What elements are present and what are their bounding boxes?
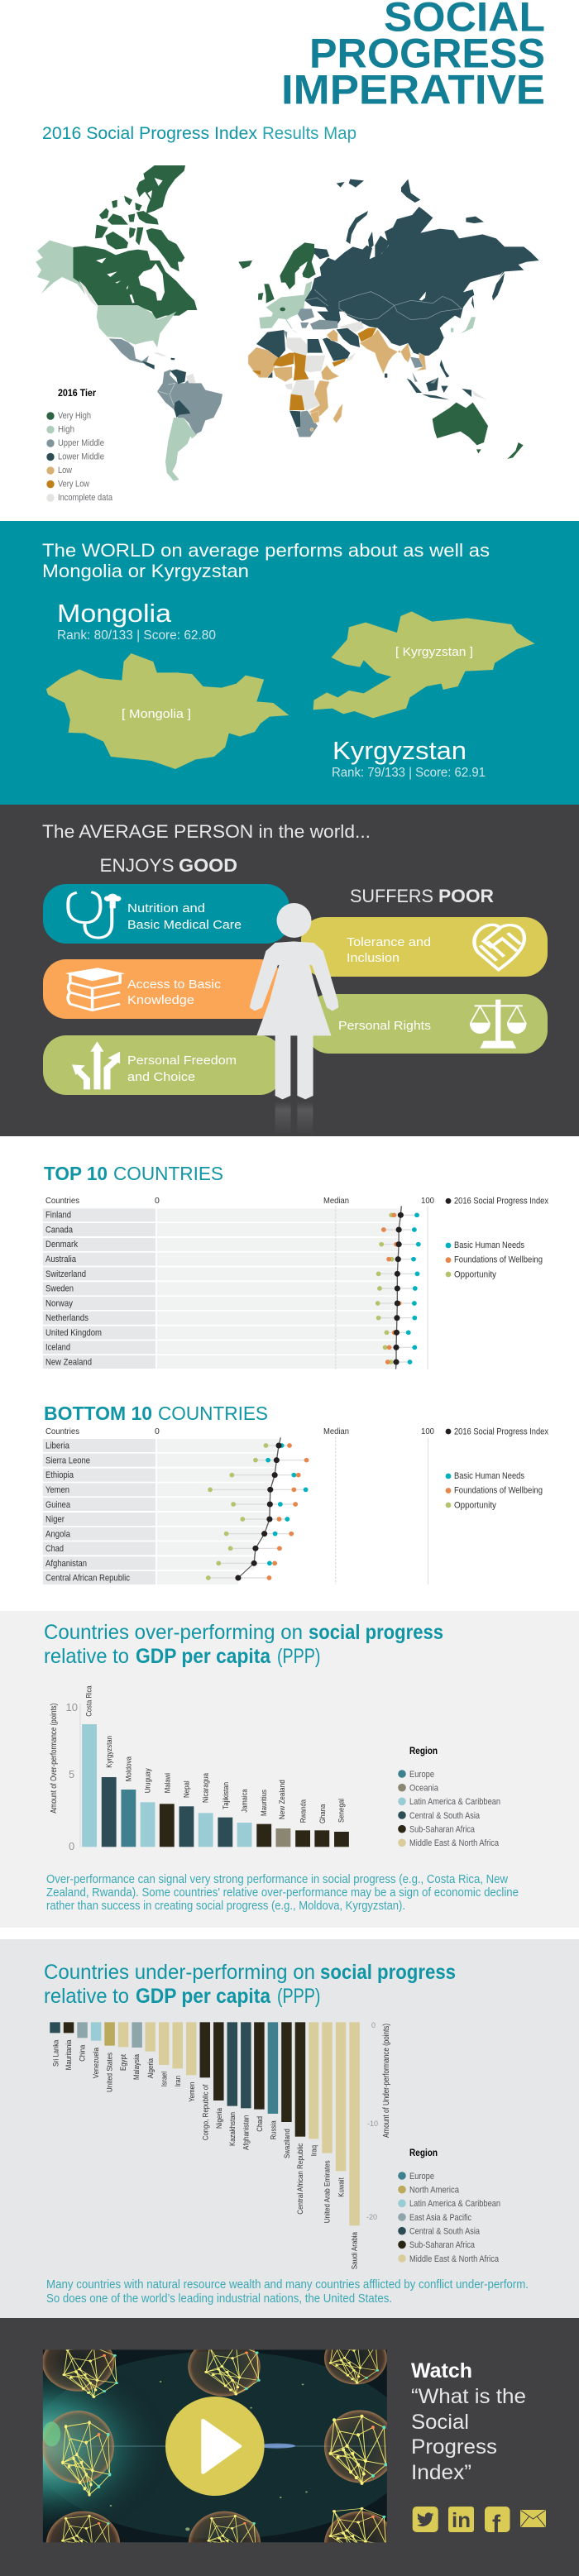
pill: freedom: and Choice [127, 1070, 195, 1084]
under-performance bars [50, 2022, 360, 2225]
top 10 country labels [45, 1211, 102, 1367]
map heading: Results Map [262, 124, 356, 143]
over-performance country labels: New Zealand [278, 1780, 287, 1819]
under-performance caption: So does one of the world’s leading industrial nations, the United States. [46, 2292, 392, 2306]
icon: books [68, 969, 120, 1011]
Kyrgyzstan title: Kyrgyzstan [333, 736, 467, 765]
under-performance country labels: China [79, 2044, 88, 2062]
pill: tolerance: Tolerance and [347, 935, 431, 949]
icon: linkedin: in [452, 2509, 471, 2532]
pill: nutrition: Nutrition and [127, 901, 205, 915]
watch text: Watch [411, 2359, 472, 2382]
over-performance bar chart [50, 1685, 349, 1852]
bottom 10 country labels: Chad [45, 1544, 64, 1554]
pill: knowledge: Access to Basic [127, 977, 222, 992]
under-performance legend: Sub-Saharan Africa [409, 2240, 476, 2250]
bottom 10 legend: Basic Human Needs [454, 1471, 524, 1481]
map: Americas [36, 165, 223, 481]
top 10 header row [45, 1196, 434, 1206]
heading: bottom 10 [44, 1403, 268, 1424]
under-performance caption [46, 2277, 529, 2306]
enjoys good heading: ENJOYS [99, 855, 174, 876]
under-performance axis: 0 [371, 2021, 376, 2029]
under-performance country labels: Central African Republic [296, 2143, 305, 2215]
under-performance axis: -10 [367, 2120, 378, 2128]
icon: person figure [250, 903, 338, 1135]
map legend: Incomplete data [58, 493, 113, 503]
over-performance country labels: Nepal [182, 1780, 192, 1798]
under-performance country labels: United States [106, 2053, 115, 2092]
over-performance axis: 0 [69, 1840, 74, 1852]
under-performance country labels: Afghanistan [242, 2115, 251, 2150]
under-performance legend [398, 2147, 500, 2264]
top 10 country labels: Finland [45, 1211, 71, 1221]
icon: twitter [413, 2507, 438, 2532]
map legend: Low [58, 466, 72, 476]
over-performance legend: Central & South Asia [409, 1811, 481, 1821]
under-performance country labels: United Arab Emirates [323, 2160, 333, 2223]
over-performance legend: Oceania [409, 1783, 439, 1793]
under-performance legend: North America [409, 2185, 460, 2195]
panel: video footer [0, 2318, 579, 2576]
over-performing heading: (PPP) [277, 1645, 321, 1668]
bottom 10 country labels: Niger [45, 1515, 65, 1525]
bottom 10 country labels: Afghanistan [45, 1559, 87, 1569]
over-performance legend: Middle East & North Africa [409, 1838, 500, 1848]
bottom 10 header row: Median [323, 1427, 349, 1436]
panel: average person [0, 805, 579, 1136]
bottom 10 country labels [45, 1441, 130, 1584]
world heading [42, 540, 490, 581]
watch text: Index” [411, 2461, 471, 2484]
under-performing heading: relative to [44, 1985, 129, 2008]
map heading [42, 124, 356, 143]
pill: personal rights [306, 994, 548, 1054]
over-performance country labels: Malawi [163, 1773, 172, 1793]
top 10 legend: Basic Human Needs [454, 1240, 524, 1250]
suffers poor heading: POOR [438, 886, 494, 906]
under-performance legend: Central & South Asia [409, 2226, 481, 2236]
Kyrgyzstan shape: [ Kyrgyzstan ] [395, 645, 473, 659]
icon: email [520, 2510, 546, 2527]
map legend: Very High [58, 411, 91, 421]
over-performance country labels: Costa Rica [85, 1685, 94, 1717]
under-performance legend: Region [409, 2147, 438, 2158]
pill: tolerance [301, 917, 548, 977]
map: Eurasia, Africa and Oceania [238, 179, 539, 459]
icon: linkedin [448, 2507, 474, 2532]
Kyrgyzstan title [332, 736, 486, 780]
over-performance country labels: Tajikistan [222, 1782, 231, 1809]
pill: nutrition [43, 884, 290, 944]
top 10 country labels: United Kingdom [45, 1328, 102, 1338]
suffers poor heading [350, 886, 494, 906]
under-performance country labels: Swaziland [283, 2129, 292, 2158]
map legend: Lower Middle [58, 452, 104, 461]
top 10 country labels: New Zealand [45, 1357, 92, 1367]
top 10 country labels: Canada [45, 1225, 74, 1235]
Mongolia shape: [ Mongolia ] [122, 707, 191, 721]
video thumbnail [43, 2349, 387, 2542]
under-performance bar chart [50, 2021, 391, 2269]
bottom 10 country labels: Angola [45, 1529, 71, 1539]
under-performance caption: Many countries with natural resource wealth and many countries afflicted by conflict under-perform. [46, 2277, 529, 2292]
under-performance legend: East Asia & Pacific [409, 2213, 471, 2223]
bottom 10 legend: Foundations of Wellbeing [454, 1485, 543, 1495]
under-performing heading: GDP per capita [136, 1985, 271, 2008]
bottom 10 header row: 0 [155, 1427, 160, 1436]
top 10 country labels: Australia [45, 1255, 77, 1264]
under-performance country labels: Malaysia [132, 2053, 141, 2080]
top 10 country labels: Sweden [45, 1284, 74, 1294]
under-performance country labels: Venezuela [92, 2047, 101, 2078]
top 10 legend: Opportunity [454, 1270, 496, 1280]
play button [165, 2397, 265, 2496]
heading: top 10: COUNTRIES [113, 1163, 223, 1184]
over-performing heading: social progress [309, 1621, 443, 1644]
world map [36, 165, 539, 503]
chart: bottom 10 countries [43, 1427, 548, 1584]
top 10 country labels: Netherlands [45, 1313, 89, 1323]
heading: top 10: TOP 10 [44, 1163, 108, 1184]
over-performance caption: Over-performance can signal very strong performance in social progress (e.g., Costa Rica, New [46, 1872, 508, 1886]
over-performance country labels: Jamaica [241, 1789, 250, 1813]
bottom 10 rows [43, 1436, 428, 1584]
over-performance legend: Latin America & Caribbean [409, 1797, 500, 1807]
over-performance legend: Sub-Saharan Africa [409, 1824, 476, 1834]
under-performance country labels: Mauritania [65, 2039, 74, 2070]
icon: arrows [72, 1041, 120, 1089]
pill: tolerance: Inclusion [347, 951, 400, 965]
under-performance legend: Europe [409, 2172, 434, 2182]
map heading: 2016 Social Progress Index [42, 124, 257, 143]
over-performance legend: Region [409, 1745, 438, 1756]
heading: bottom 10: BOTTOM 10 [44, 1403, 152, 1424]
panel: under-performing [0, 1939, 579, 2318]
over-performing heading: Countries over-performing on [44, 1621, 303, 1644]
top 10 header row: Countries [45, 1196, 79, 1206]
Mongolia title: Mongolia [57, 599, 172, 628]
under-performance legend: Middle East & North Africa [409, 2254, 500, 2264]
under-performance axis: -20 [366, 2213, 377, 2221]
enjoys good heading: GOOD [179, 855, 237, 876]
under-performance country labels: Kuwait [337, 2177, 346, 2197]
heading: bottom 10: COUNTRIES [158, 1403, 268, 1424]
watch text: “What is the [411, 2385, 526, 2408]
under-performance country labels: Egypt [119, 2054, 128, 2071]
over-performance legend: Europe [409, 1770, 434, 1780]
over-performance caption: rather than success in creating social progress (e.g., Moldova, Kyrgyzstan). [46, 1899, 405, 1913]
over-performance country labels: Nicaragua [202, 1772, 211, 1803]
over-performing heading: relative to [44, 1645, 129, 1668]
top 10 legend: 2016 Social Progress Index [454, 1196, 548, 1206]
bottom 10 country labels: Sierra Leone [45, 1455, 90, 1465]
bottom 10 header row: Countries [45, 1427, 79, 1436]
enjoys good heading [99, 855, 237, 876]
under-performing heading: (PPP) [277, 1985, 321, 2008]
suffers poor heading: SUFFERS [350, 886, 433, 906]
under-performance country labels: Nigeria [215, 2107, 224, 2129]
bottom 10 legend [446, 1427, 548, 1510]
under-performance legend: Latin America & Caribbean [409, 2199, 500, 2209]
over-performance country labels: Senegal [337, 1799, 346, 1823]
over-performance axis: 5 [69, 1768, 74, 1780]
icon: scales [470, 1000, 527, 1049]
bottom 10 country labels: Liberia [45, 1441, 70, 1451]
under-performance country labels: Israel [160, 2072, 169, 2086]
over-performance country labels: Uruguay [144, 1768, 153, 1793]
under-performing heading: Countries under-performing on [44, 1961, 315, 1984]
watch text: Progress [411, 2435, 497, 2459]
bottom 10 country labels: Guinea [45, 1500, 71, 1510]
watch text: Social [411, 2411, 469, 2434]
under-performance country labels: Chad [256, 2116, 265, 2132]
icon: heart handshake [474, 925, 524, 970]
over-performance country labels: Kyrgyzstan [105, 1736, 114, 1768]
over-performance country labels: Mauritius [260, 1790, 269, 1816]
bottom 10 header row [45, 1427, 434, 1436]
under-performance country labels: Sri Lanka [51, 2039, 61, 2067]
bottom 10 legend: 2016 Social Progress Index [454, 1427, 548, 1437]
Mongolia title: Rank: 80/133 | Score: 62.80 [57, 628, 216, 643]
under-performance country labels: Iran [174, 2076, 183, 2086]
Kyrgyzstan title: Rank: 79/133 | Score: 62.91 [332, 766, 486, 780]
over-performance caption [46, 1872, 519, 1913]
over-performance axis [50, 1701, 80, 1852]
top 10 country labels: Iceland [45, 1343, 70, 1353]
top 10 country labels: Norway [45, 1298, 73, 1308]
pill: freedom [43, 1035, 283, 1095]
pill: nutrition: Basic Medical Care [127, 918, 242, 932]
icon: stethoscope and broccoli [68, 892, 121, 938]
top 10 legend [446, 1196, 548, 1280]
under-performance country labels: Iraq [309, 2145, 319, 2156]
top 10 header row: 0 [155, 1196, 160, 1206]
bottom 10 legend: Opportunity [454, 1500, 496, 1510]
over-performance country labels: Rwanda [299, 1799, 308, 1823]
over-performance caption: Zealand, Rwanda). Some countries' relative over-performance may be a sign of economic decline [46, 1885, 519, 1900]
title: PROGRESS [309, 30, 545, 76]
title [281, 0, 545, 112]
map legend: Upper Middle [58, 438, 104, 448]
Kyrgyzstan shape [313, 611, 534, 718]
pill: freedom: Personal Freedom [127, 1054, 237, 1068]
world heading: Mongolia or Kyrgyzstan [42, 561, 249, 581]
chart: top 10 countries [43, 1196, 548, 1369]
under-performing heading: social progress [320, 1961, 456, 1984]
average person heading: The AVERAGE PERSON in the world... [42, 821, 371, 842]
panel: world average [0, 521, 579, 805]
over-performance country labels: Ghana [318, 1804, 328, 1823]
pill: knowledge [43, 959, 283, 1019]
under-performance country labels: Kazakhstan [228, 2112, 237, 2146]
over-performance country labels [85, 1685, 346, 1823]
map legend [46, 387, 113, 503]
under-performance country labels: Algeria [146, 2057, 156, 2078]
heading: top 10 [44, 1163, 223, 1184]
map legend: High [58, 425, 74, 435]
under-performance country labels: Saudi Arabia [351, 2231, 360, 2269]
under-performance country labels: Russia [269, 2120, 278, 2139]
bottom 10 country labels: Yemen [45, 1485, 69, 1495]
under-performance axis: Amount of Under-performance (points) [382, 2024, 391, 2138]
over-performance axis: Amount of Over-performance (points) [50, 1704, 59, 1814]
icon: facebook: f [492, 2511, 501, 2538]
top 10 legend: Foundations of Wellbeing [454, 1255, 543, 1265]
over-performance bars [82, 1724, 349, 1847]
Mongolia shape [46, 653, 290, 769]
icon: facebook [485, 2507, 510, 2538]
bottom 10 header row: 100 [421, 1427, 434, 1436]
under-performance country labels [51, 2039, 360, 2269]
Mongolia title [57, 599, 216, 643]
under-performance axis [366, 2021, 391, 2221]
bottom 10 country labels: Central African Republic [45, 1574, 130, 1584]
under-performance country labels: Yemen [188, 2082, 197, 2102]
under-performance country labels: Congo, Republic of [201, 2084, 210, 2140]
over-performance legend [398, 1745, 500, 1848]
over-performing heading [44, 1621, 443, 1668]
under-performing heading [44, 1961, 456, 2008]
pill: personal rights: Personal Rights [338, 1019, 431, 1033]
over-performance country labels: Moldova [124, 1756, 133, 1781]
top 10 header row: 100 [421, 1196, 434, 1206]
over-performance axis: 10 [66, 1701, 78, 1713]
world heading: The WORLD on average performs about as well as [42, 540, 490, 561]
watch text [411, 2359, 526, 2484]
map legend: 2016 Tier [58, 387, 96, 399]
pill: knowledge: Knowledge [127, 993, 194, 1007]
top 10 country labels: Switzerland [45, 1269, 86, 1279]
top 10 country labels: Denmark [45, 1240, 78, 1250]
over-performing heading: GDP per capita [136, 1645, 271, 1668]
bottom 10 country labels: Ethiopia [45, 1470, 74, 1480]
top 10 rows [43, 1206, 428, 1369]
map legend: Very Low [58, 480, 89, 490]
top 10 header row: Median [323, 1196, 349, 1206]
title: IMPERATIVE [281, 66, 545, 112]
panel: over-performing [0, 1611, 579, 1928]
